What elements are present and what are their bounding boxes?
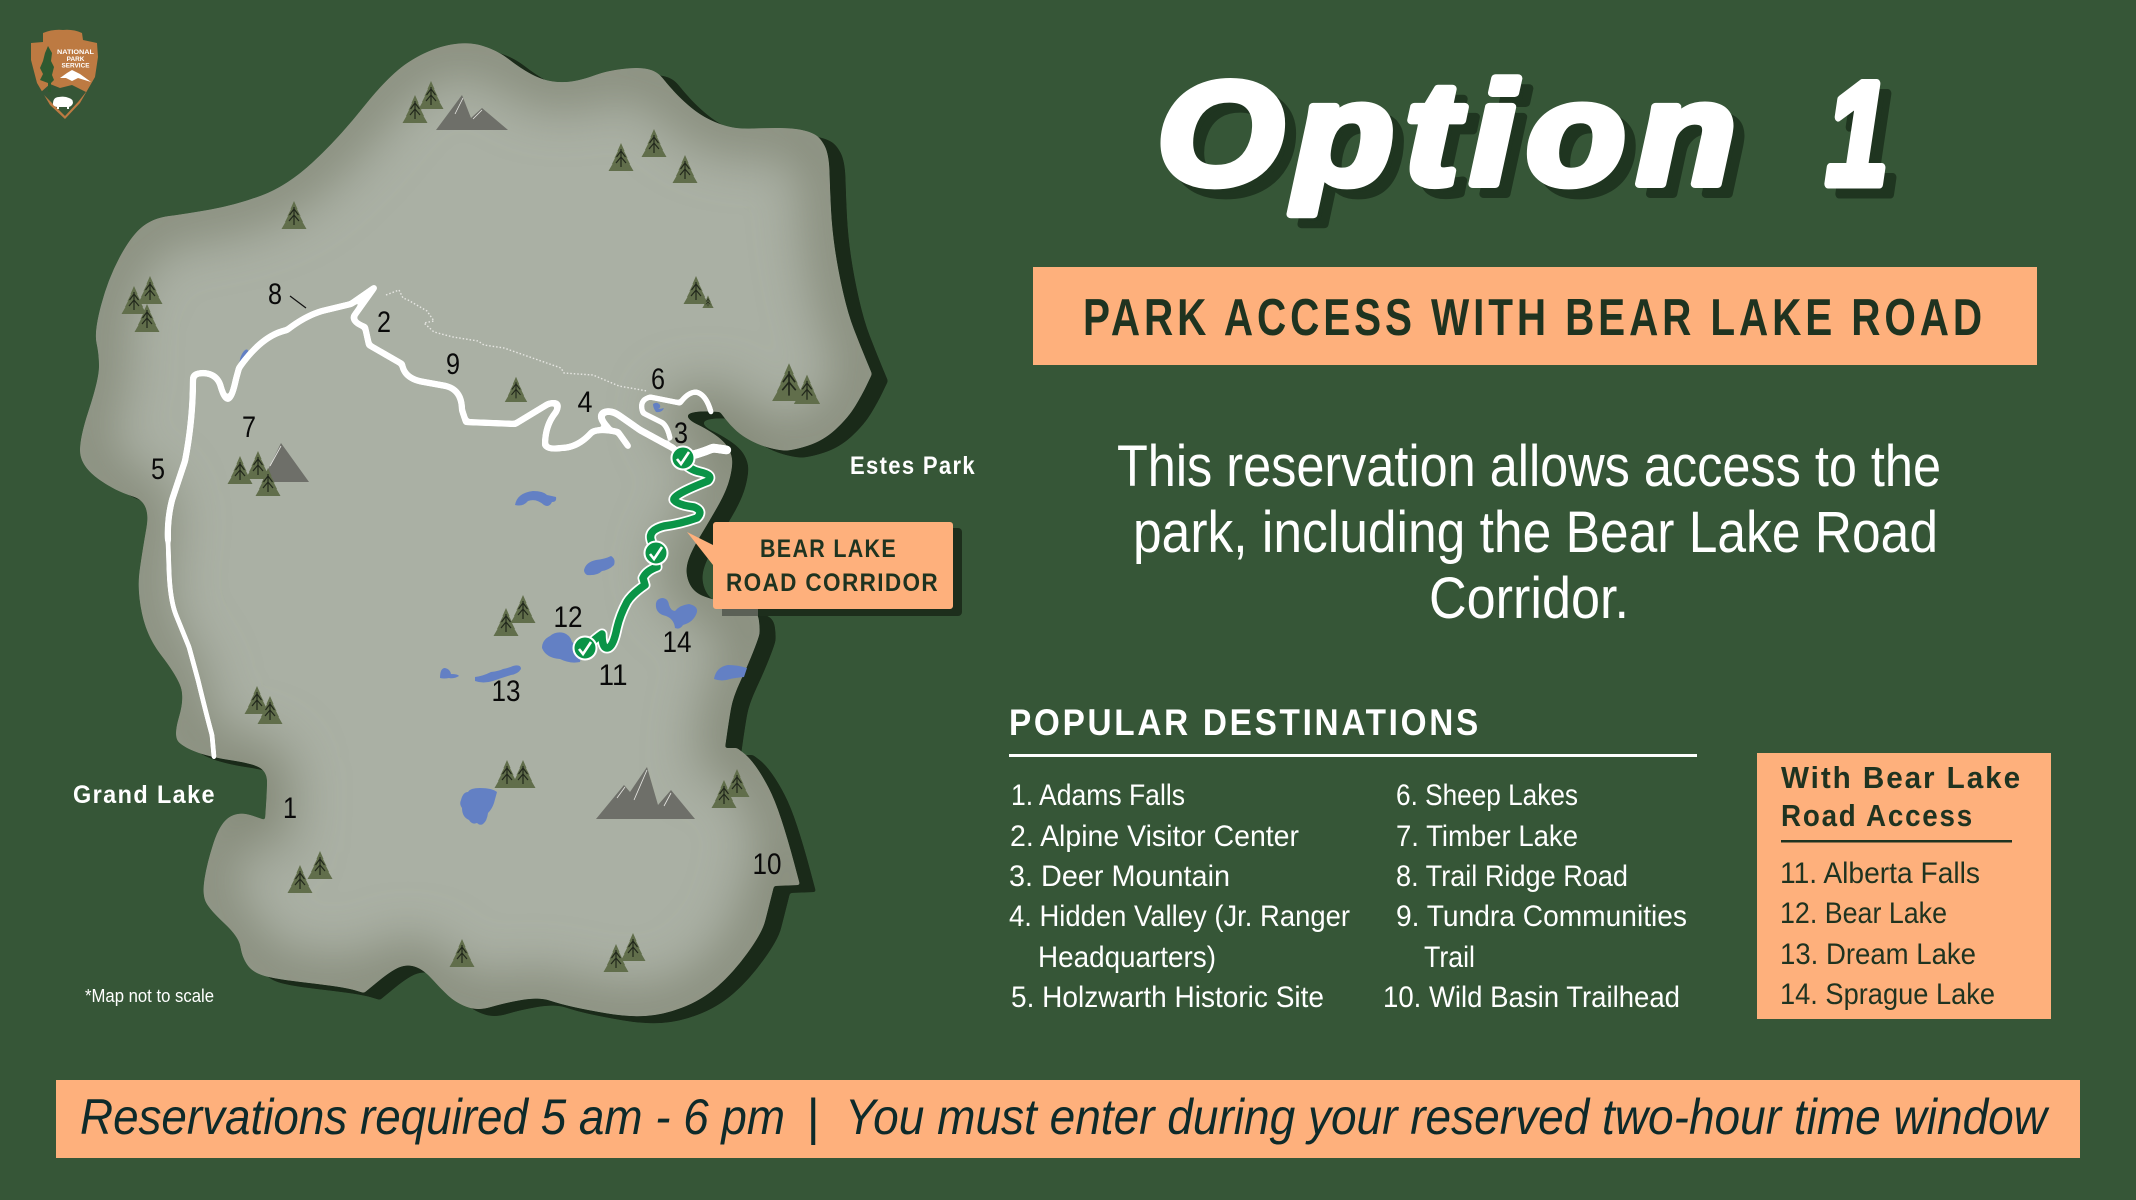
destinations list: Headquarters) [1038, 941, 1216, 974]
land area [60, 30, 890, 1030]
map number labels: 14 [662, 626, 692, 659]
logo text: SERVICE [62, 62, 90, 70]
land shadow [96, 50, 888, 1023]
panel list: 13. Dream Lake [1780, 938, 1976, 971]
heading popular destinations: POPULAR DESTINATIONS [1009, 702, 1481, 743]
label Estes Park: Estes Park [850, 452, 976, 480]
description paragraph [1117, 434, 1941, 631]
map number labels [151, 278, 782, 881]
road fill [585, 462, 710, 648]
map number labels: 5 [151, 453, 165, 486]
title Option 1 [1157, 52, 1899, 225]
lower green field [41, 84, 86, 116]
destinations list [1009, 779, 1687, 1014]
banner text: | [806, 1089, 819, 1146]
check marker Bear Lake [574, 636, 596, 660]
note map not to scale: *Map not to scale [85, 986, 214, 1006]
panel list: 14. Sprague Lake [1780, 978, 1995, 1011]
map of the park [60, 30, 976, 1030]
Bear Lake Road corridor [574, 446, 710, 660]
panel list: 12. Bear Lake [1780, 897, 1947, 930]
banner park access [1033, 267, 2037, 365]
destinations list: 10. Wild Basin Trailhead [1383, 981, 1680, 1014]
panel list: 11. Alberta Falls [1780, 857, 1980, 890]
lakes [238, 348, 747, 825]
callout line 1: BEAR LAKE [760, 535, 897, 563]
map number labels: 9 [446, 348, 460, 381]
logo text [57, 49, 94, 70]
map number labels: 2 [377, 306, 391, 339]
bottom banner reservations [56, 1080, 2080, 1158]
destinations list: 2. Alpine Visitor Center [1010, 820, 1299, 853]
mountain west [262, 443, 309, 482]
map number labels: 3 [674, 417, 688, 450]
destinations list: 8. Trail Ridge Road [1396, 860, 1628, 893]
title shadow word: Option [1168, 62, 1758, 225]
destinations list: Trail [1424, 941, 1475, 974]
road outline [585, 462, 710, 648]
destinations list: 6. Sheep Lakes [1396, 779, 1578, 812]
description paragraph: This reservation allows access to the [1117, 434, 1941, 499]
callout shadow [722, 528, 962, 616]
map number labels: 8 [268, 278, 282, 311]
callout line 2: ROAD CORRIDOR [726, 569, 939, 597]
callout shadow over land [722, 609, 758, 616]
destinations list: 5. Holzwarth Historic Site [1011, 981, 1324, 1014]
trees [122, 81, 820, 972]
map number labels: 11 [598, 659, 628, 692]
arrowhead body [31, 30, 98, 119]
logo text: PARK [67, 56, 85, 63]
panel list [1780, 857, 1995, 1011]
white mountain [60, 70, 91, 82]
map number labels: 10 [752, 848, 782, 881]
callout Bear Lake Road Corridor [687, 522, 962, 616]
destinations list: 4. Hidden Valley (Jr. Ranger [1009, 900, 1350, 933]
check marker middle [644, 542, 668, 564]
banner text [80, 1089, 2050, 1146]
panel heading: With Bear Lake [1781, 760, 2022, 795]
title word: Option [1157, 52, 1747, 215]
destinations list: 7. Timber Lake [1396, 820, 1578, 853]
panel heading [1781, 760, 2022, 833]
title shadow digit: 1 [1837, 62, 1899, 225]
leader line for label 8 [290, 296, 306, 308]
map number labels: 13 [492, 675, 520, 708]
white park roads [168, 288, 727, 757]
mountains [262, 95, 695, 819]
banner text: You must enter during your reserved two-hour time window [845, 1089, 2050, 1145]
label Grand Lake: Grand Lake [73, 781, 216, 809]
description paragraph: park, including the Bear Lake Road [1133, 500, 1938, 565]
logo text: NATIONAL [57, 49, 94, 56]
description paragraph: Corridor. [1429, 566, 1629, 631]
mountain south [596, 767, 695, 819]
NPS arrowhead logo [31, 30, 98, 119]
destinations list: 9. Tundra Communities [1396, 900, 1687, 933]
map number labels: 4 [578, 386, 592, 419]
banner text: Reservations required 5 am - 6 pm [80, 1089, 785, 1145]
map number labels: 1 [283, 792, 297, 825]
destinations list: 3. Deer Mountain [1009, 860, 1230, 893]
bison [53, 97, 73, 109]
panel with Bear Lake Road access [1757, 753, 2051, 1019]
destinations list: 1. Adams Falls [1011, 779, 1185, 812]
Tundra Communities Trail dotted line [386, 290, 647, 391]
check marker Bear Lake Road entry [672, 446, 694, 470]
title digit: 1 [1826, 52, 1888, 215]
callout box [687, 522, 953, 609]
sequoia tree [40, 46, 54, 92]
map number labels: 6 [651, 363, 665, 396]
map number labels: 12 [554, 601, 582, 634]
mountain north [436, 95, 508, 130]
panel heading: Road Access [1781, 798, 1974, 833]
map number labels: 7 [242, 411, 256, 444]
